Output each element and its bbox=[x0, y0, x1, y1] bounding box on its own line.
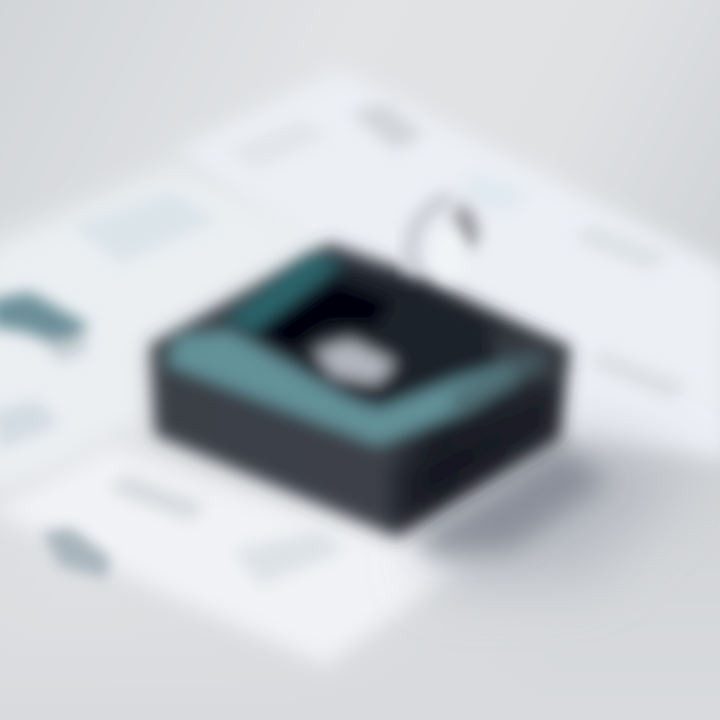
panel: left edge sheet bbox=[0, 330, 150, 500]
device black cavity bbox=[258, 282, 390, 350]
device: dark square box bbox=[150, 243, 570, 537]
device upper left teal wall bbox=[222, 254, 345, 336]
device teal front rim bbox=[165, 330, 520, 446]
dense contact shadow bbox=[420, 445, 610, 555]
device teal right rim fade bbox=[450, 350, 545, 415]
ring dark right edge bbox=[450, 202, 482, 250]
ring bright centre bbox=[434, 226, 464, 282]
device body bbox=[150, 243, 570, 537]
panel: upper right document sheet bbox=[175, 70, 720, 460]
device shadow bbox=[420, 430, 690, 585]
device right corner lighter rim bbox=[490, 330, 565, 380]
soft outer shadow bbox=[420, 430, 690, 585]
device dark upper surface bbox=[225, 258, 520, 425]
icon: grey-blue label on lower sheet bbox=[42, 528, 110, 578]
device centre light panel bbox=[312, 338, 398, 386]
icon: teal card on left sheet bbox=[0, 292, 90, 362]
sheet content: faint text blocks bbox=[0, 103, 690, 585]
panel: middle left document sheet bbox=[0, 165, 330, 420]
ring left edge bbox=[411, 198, 452, 272]
device dark right side bbox=[395, 385, 555, 525]
panel: lower left document sheet bbox=[0, 445, 465, 665]
icon: metal ring above device bbox=[411, 198, 482, 282]
